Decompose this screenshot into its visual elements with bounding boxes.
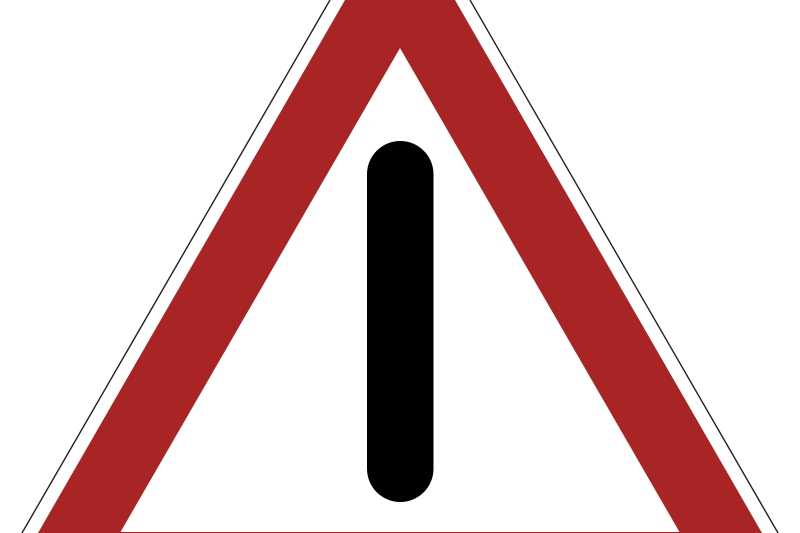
icon: black exclamation bar [367, 141, 434, 502]
white triangle interior [120, 48, 680, 532]
